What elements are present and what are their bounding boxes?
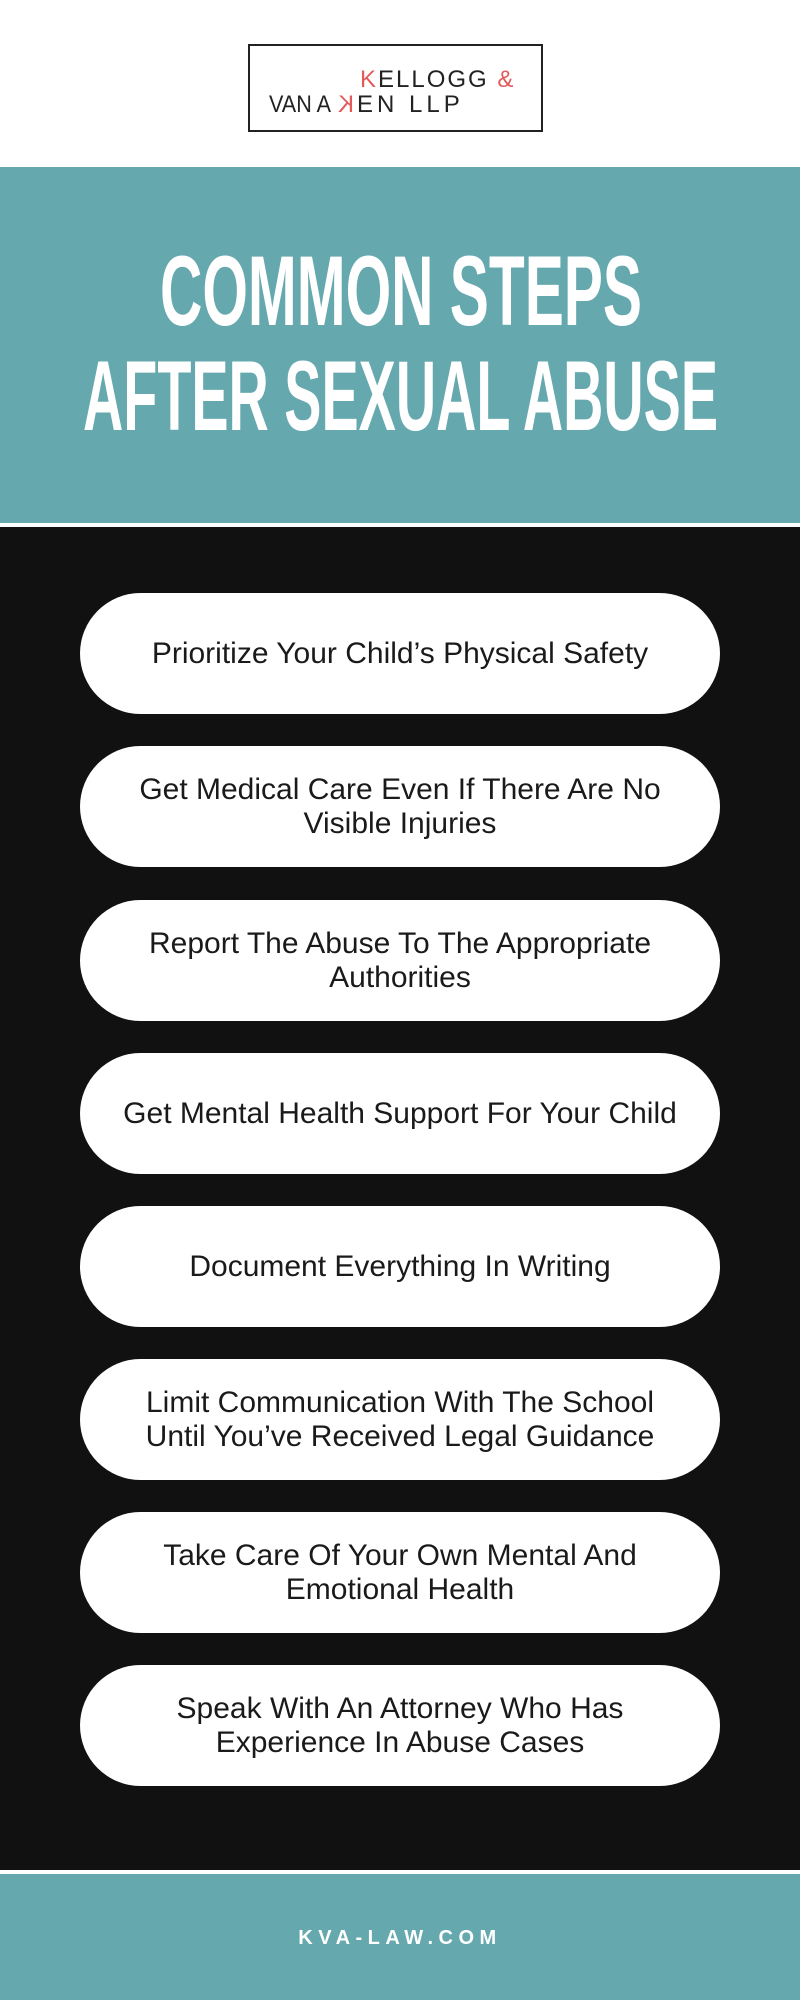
dark panel: steps — [0, 527, 800, 1870]
step 2: Get Medical Care Even If There Are No Visible Injuries — [139, 772, 661, 840]
step 7: Take Care Of Your Own Mental And Emotional Health — [163, 1538, 637, 1606]
step 4 — [80, 1053, 720, 1174]
step 8 — [80, 1665, 720, 1786]
step 1: Prioritize Your Child’s Physical Safety — [152, 636, 648, 670]
step 8: Speak With An Attorney Who Has Experience In Abuse Cases — [177, 1692, 623, 1758]
logo text line 2: EN LLP — [357, 91, 464, 118]
logo text line 1: KELLOGG & — [360, 66, 515, 93]
footer: KVA-LAW.COM — [298, 1927, 502, 1949]
step 4: Get Mental Health Support For Your Child — [123, 1096, 677, 1130]
logo text line 2: K — [338, 91, 354, 118]
step 7 — [80, 1512, 720, 1633]
footer — [0, 1874, 800, 2000]
header band — [0, 167, 800, 523]
step 6: Limit Communication With The School Until You’ve Received Legal Guidance — [146, 1386, 654, 1452]
step 5: Document Everything In Writing — [189, 1250, 611, 1282]
logo text line 2 — [269, 91, 464, 118]
step 3 — [80, 900, 720, 1021]
step 2 — [80, 746, 720, 867]
step 3: Report The Abuse To The Appropriate Authorities — [149, 926, 651, 994]
step 5 — [80, 1206, 720, 1327]
step 1 — [80, 593, 720, 714]
logo text line 2: VAN A — [269, 91, 331, 118]
title — [83, 235, 718, 451]
step 6 — [80, 1359, 720, 1480]
logo — [248, 44, 543, 132]
